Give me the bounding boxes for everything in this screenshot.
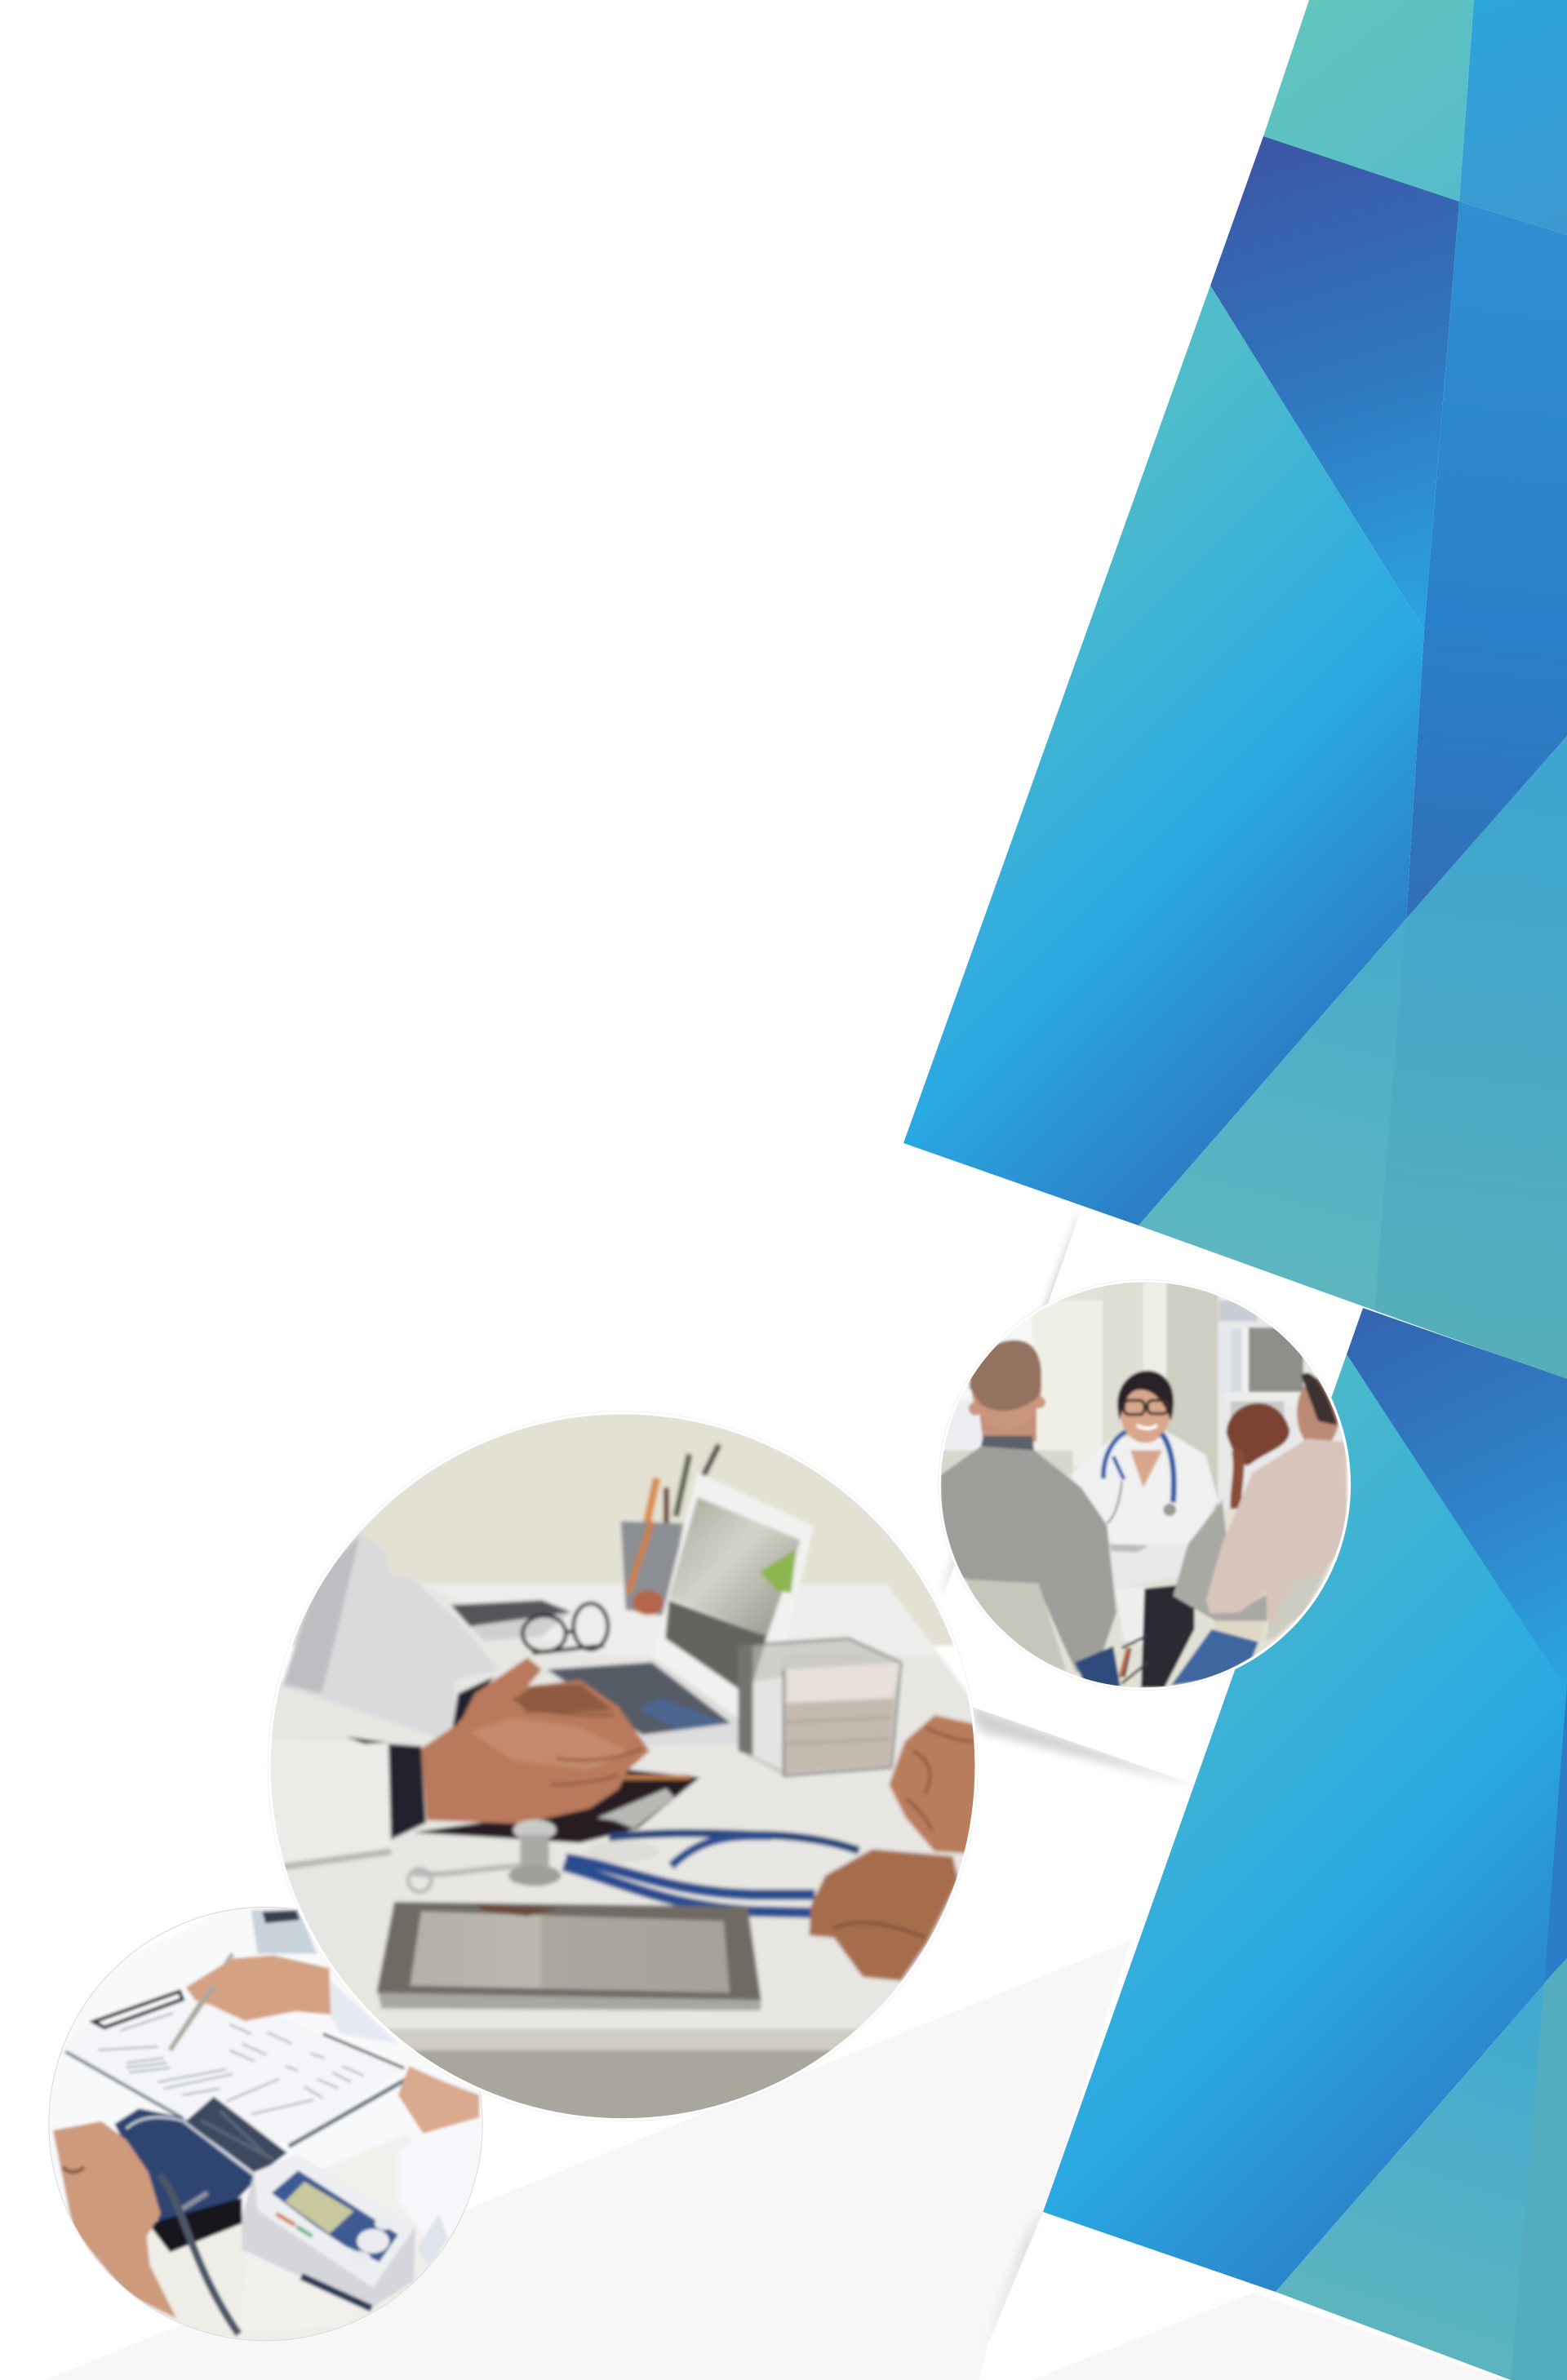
cuff second layer	[186, 2097, 287, 2175]
large teal to blue facet	[903, 286, 1424, 1225]
pen holder	[621, 1444, 719, 1617]
doctor clasped hands	[421, 1658, 650, 1824]
back notebook	[451, 1600, 571, 1626]
window and wall	[936, 1275, 1034, 1451]
blue right stripe facet	[1406, 202, 1567, 919]
patient hand	[53, 2121, 176, 2318]
lower teal stripe	[1374, 736, 1567, 1380]
light grey floor band	[45, 1940, 1506, 2380]
dark blue upper facet	[1347, 1308, 1567, 1693]
glasses	[522, 1603, 608, 1653]
bottom teal stripe	[1511, 1958, 1567, 2380]
shelves and binders	[1218, 1275, 1355, 1509]
doctor hand with pen	[170, 1953, 331, 2050]
form text lines	[98, 2013, 364, 2114]
upper sleeve	[282, 1533, 499, 1742]
tablet	[376, 1902, 761, 2010]
stethoscope	[408, 1819, 859, 1912]
table surface	[88, 2223, 437, 2340]
wall	[264, 1406, 983, 1646]
blood pressure cuff	[114, 2108, 258, 2230]
blue sliver facet	[1544, 1685, 1567, 1983]
photo circle: blood pressure check	[48, 1906, 483, 2342]
photo circle: desk with doctor hands	[264, 1406, 983, 2125]
lower geometric panel	[1043, 1308, 1567, 2380]
clipboard edges	[65, 2052, 183, 2118]
lower sleeve	[264, 1740, 389, 1867]
patient clasped hands	[889, 1715, 978, 1854]
blue top-right facet	[1459, 0, 1567, 235]
bottom teal facet	[1276, 1958, 1567, 2380]
teal top facet	[1263, 0, 1474, 202]
dark cuff lower	[388, 1744, 426, 1840]
clipboard sheet	[64, 1996, 404, 2145]
coat sleeve lower	[398, 2117, 479, 2255]
dark cuff upper	[452, 1677, 494, 1732]
paper fold shadows	[939, 1199, 1200, 2354]
patient lower hand	[809, 1849, 958, 1981]
doctor lower body	[1116, 1585, 1150, 1646]
photo circle: family consultation	[936, 1275, 1355, 1696]
mother from behind	[1206, 1373, 1347, 1640]
doctor	[1071, 1371, 1218, 1548]
girl with braid	[1171, 1403, 1290, 1686]
laptop	[542, 1472, 814, 1745]
large teal to blue facet	[1043, 1354, 1567, 2292]
man from behind	[940, 1340, 1121, 1687]
clipboard	[412, 1769, 700, 1843]
clipboard clip	[94, 1992, 183, 2028]
coat sleeve upper	[330, 1979, 398, 2044]
upper geometric panel	[903, 0, 1567, 1380]
blood pressure monitor	[242, 2154, 415, 2308]
table front	[264, 2028, 983, 2053]
clear box with cards	[739, 1638, 901, 1776]
photo ring	[49, 1907, 482, 2341]
lower teal facet	[1139, 736, 1567, 1380]
laptop corner	[251, 1908, 317, 1953]
tube	[159, 2175, 239, 2334]
table	[1109, 1545, 1186, 1589]
table top	[264, 1584, 983, 2058]
doctor right hand	[398, 2066, 479, 2134]
dark blue facet	[1210, 136, 1459, 630]
